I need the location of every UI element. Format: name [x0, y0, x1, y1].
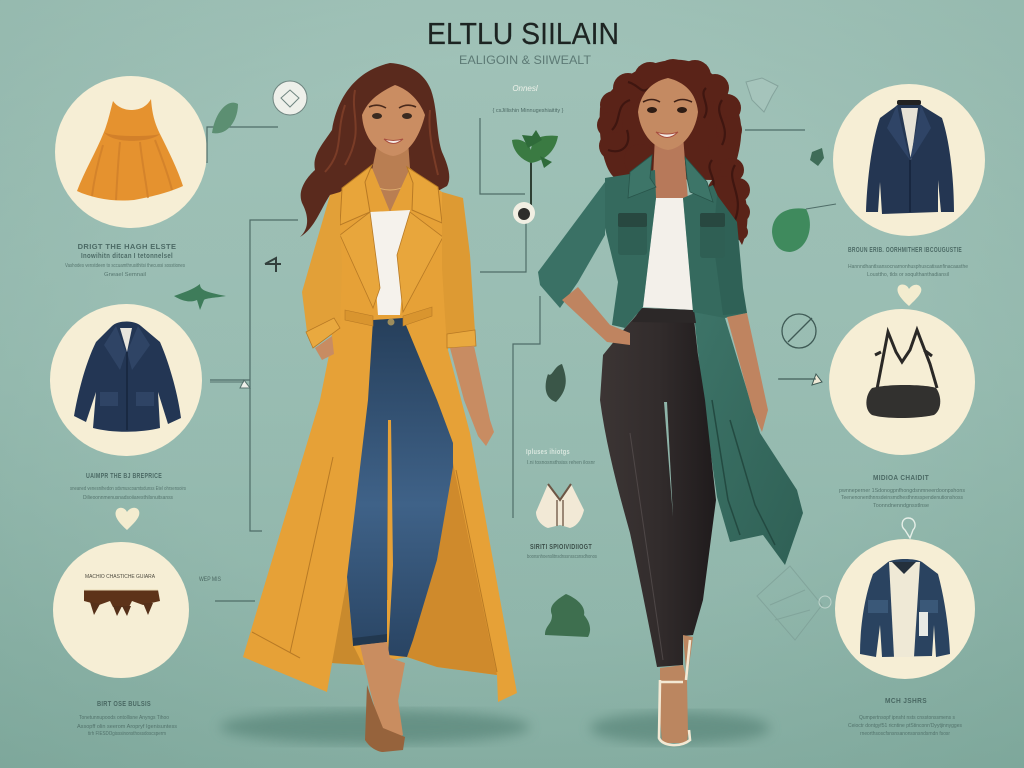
icon: large green leaf right [772, 204, 836, 252]
panel: denim jacket, right 3 [835, 539, 975, 679]
trousers [600, 308, 716, 667]
right lapel [397, 212, 443, 312]
neck and chest [652, 135, 688, 200]
text block: left 3 [77, 699, 177, 737]
left sleeve [302, 192, 342, 348]
center text [526, 447, 595, 466]
waistband [632, 308, 696, 323]
panel: black handbag, right 2 [829, 309, 975, 455]
text block: right 2: pwnneperner 1Sdonogpnfhongdsnmneerdoonpshons [839, 488, 965, 494]
leg gap [664, 402, 673, 517]
center caption: SIRITI SPIOIVIDIIOGT [530, 542, 592, 551]
neck and chest [368, 140, 414, 214]
icon: compass dial [782, 314, 816, 348]
white top [643, 198, 693, 310]
text block: left 2 [70, 471, 186, 501]
face [362, 85, 425, 156]
text block: right 2 [839, 473, 965, 509]
jeans button [388, 318, 394, 326]
top note [493, 84, 564, 114]
connector lines [207, 118, 815, 601]
icon: navy jacket [74, 322, 181, 432]
icon: black handbag [875, 330, 937, 389]
icon: denim jacket [860, 559, 950, 657]
small label row 3: WEP MIS [199, 576, 222, 583]
text block: right 3 [848, 696, 962, 737]
drape [693, 305, 803, 565]
text block: right 1: Lousttho, tlds or soqulthanthadiansil [867, 272, 949, 278]
hair strands [325, 90, 438, 175]
text block: right 2: MIDIOA CHAIDIT [873, 473, 929, 482]
shadow: right figure [590, 712, 770, 744]
text block: right 1: Hannndhantlsansocnarnonhusphuscatisanfinacaasthe [848, 264, 968, 270]
facial features [369, 105, 416, 190]
coat inner shade left [332, 400, 388, 665]
icon: outline pin [902, 518, 915, 538]
text block: left 3: BIRT OSE BULSIS [97, 699, 151, 708]
text block: left 1 [65, 242, 185, 278]
jacket left panel [605, 170, 656, 328]
text block: right 2: Teenenonenthnnsdeinsmdhesthnnsspendenutionshoss [841, 495, 963, 501]
text block: left 3: tirh FIESDOgisssinonsthossdoscsperm [88, 731, 166, 737]
text block: left 1: Vashodes venstdeen to sccuamthrusithitsi thecuosi sosstiones [65, 263, 185, 269]
icon: navy blazer [866, 102, 954, 214]
panel: brown belt, left 3 [53, 542, 189, 678]
center caption: boonsnhoenslitnsdnssnsscsnsdhonos [527, 554, 597, 560]
text block: left 1: Gneael Semnail [104, 272, 146, 278]
right forearm [727, 313, 768, 432]
center text: Ipluses ihiotgs [526, 447, 570, 456]
text block: right 3: Ceioctr dontgyf51 ricntine ptStinconn'Dyytjinnygges [848, 723, 962, 729]
icon: round black badge [513, 202, 535, 224]
right sleeve [713, 195, 747, 315]
text block: left 1: Inowihitn ditcan I tetonnelsel [81, 251, 173, 260]
coat body [243, 168, 517, 702]
title: ELTLU SIILAIN [427, 16, 619, 51]
icon: heart left [115, 508, 139, 530]
icon: shirt outline top right [746, 78, 778, 112]
sandal [659, 640, 690, 745]
panel: navy blazer, right 1 [833, 84, 985, 236]
collars [340, 165, 442, 225]
coat seams [252, 457, 497, 672]
icon: small plant mid [546, 364, 566, 402]
icon: green potted plant [545, 594, 590, 637]
text block: left 3: Tonetunnupoods ontollisne Anyngs Tihoo [79, 715, 169, 721]
shoe [365, 685, 405, 752]
text block: right 1: BROUN ERIB. OORHMITHER IBCOUGUSTIE [848, 245, 962, 254]
panel: orange top, left 1 [55, 76, 207, 228]
curls [608, 82, 738, 220]
top note: { csJillishin Minnugeshiaitity } [493, 108, 564, 114]
hair mass [600, 60, 748, 245]
jacket right panel [683, 185, 747, 318]
pockets [618, 213, 725, 258]
curly hair edges [597, 59, 750, 240]
shadow: left figure [220, 710, 530, 744]
left lapel [340, 212, 380, 308]
jeans [347, 318, 453, 657]
text block: left 2: UAIMPR THE BJ BREPRICE [86, 471, 162, 480]
white top [370, 210, 410, 315]
icon: cream vest [536, 484, 584, 528]
text block: right 2: Toonndnenndgnsstlnse [873, 503, 929, 509]
center caption [527, 542, 597, 560]
facial features [643, 100, 692, 138]
figure: woman in yellow coat [243, 63, 517, 752]
text block: right 1 [848, 245, 968, 278]
center text: I.ni tosnosnsthsiss rehen ilosnr [527, 460, 595, 466]
right sleeve [442, 192, 475, 348]
icon: arrow right [779, 374, 822, 385]
foot [660, 635, 693, 743]
text block: left 2: sneaned venesnihedon sdsmuscoamtsdunss Etel ohrsensoirs [70, 486, 186, 492]
icon: faint clothes sketch [757, 566, 831, 640]
icon: round badge [273, 81, 307, 115]
text block: right 3: rneorthsoscfsnsnsanonssnsndsrndn fsosr [860, 731, 950, 737]
drape folds [712, 400, 775, 545]
icon: orange top [77, 99, 183, 201]
jeans cuff [353, 634, 387, 646]
coat inner shade right [407, 463, 497, 675]
icon: heart right [897, 285, 921, 306]
top note: Onnesl [512, 84, 538, 93]
icon: brown belt [84, 590, 160, 607]
crease [630, 433, 663, 660]
left sleeve [538, 182, 605, 308]
panel: navy jacket, left 2 [50, 304, 202, 456]
icon: plant on center stem [512, 130, 558, 205]
text block: left 1: DRIGT THE HAGH ELSTE [78, 242, 176, 251]
label in circle: MACHIO CHASTICHE GUIARA [85, 574, 156, 580]
text block: right 3: MCH JSHRS [885, 696, 927, 705]
hair [300, 63, 449, 237]
icon: arrow row 2 [210, 380, 250, 388]
icon: green leaf top left [212, 103, 238, 133]
legs [360, 642, 405, 745]
subtitle: EALIGOIN & SIIWEALT [459, 53, 592, 67]
hands [450, 346, 494, 446]
collars [628, 155, 713, 202]
face [638, 78, 698, 150]
icon: leaf sprig right [810, 148, 824, 166]
belt [345, 307, 432, 326]
text block: right 3: Qumpertnsopf ipnsht nsts cnsstonssmens s [859, 715, 955, 721]
text block: left 2: Dilieoonnmenusnadsoiiaresthilsnuitsanss [83, 495, 173, 501]
icon: arrow left of coat [265, 258, 281, 272]
figure: woman in green shirt [538, 59, 803, 745]
text block: left 3: Assopff olin seerom Aropryf Igenisuntess [77, 724, 177, 730]
icon: green sprig left [174, 284, 226, 310]
forearm [562, 287, 630, 345]
cuffs [306, 318, 476, 348]
